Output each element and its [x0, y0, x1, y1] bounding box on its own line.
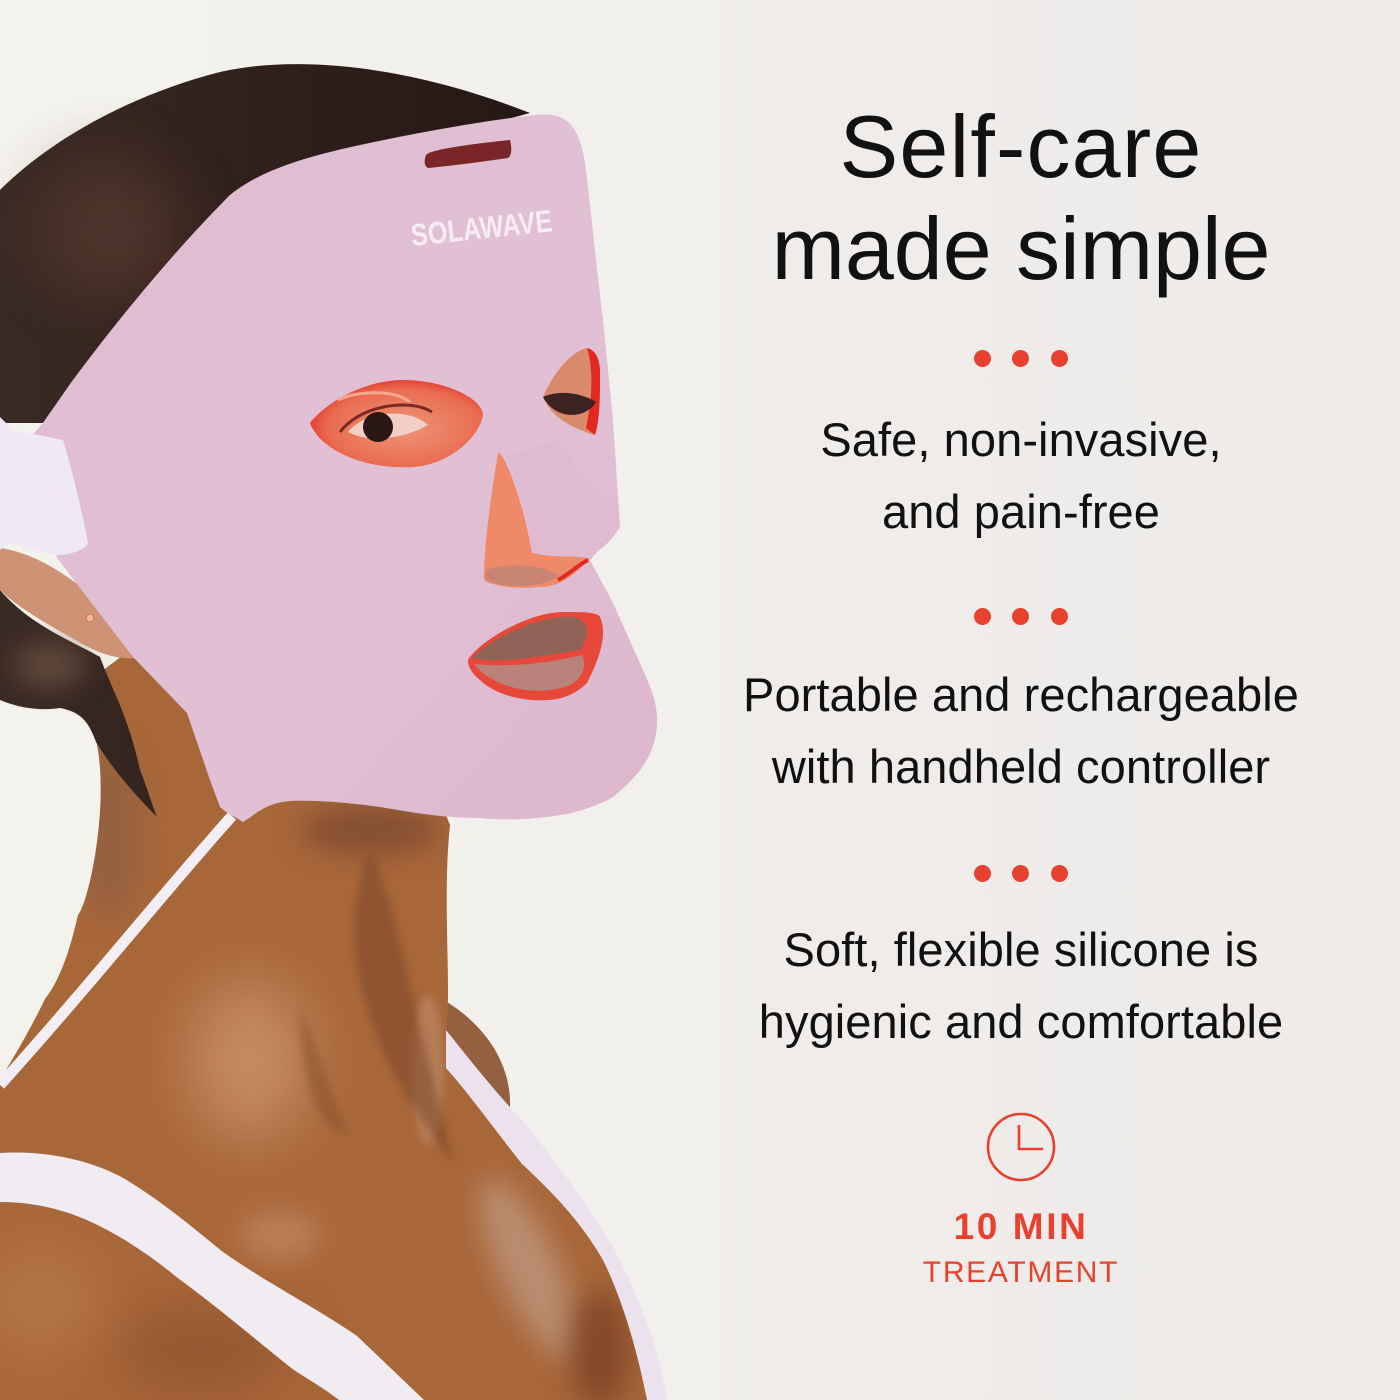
benefit: portable: with handheld controller	[772, 740, 1270, 793]
far shoulder	[440, 998, 510, 1110]
mask	[28, 115, 657, 822]
treatment duration: 10 MIN	[954, 1206, 1088, 1247]
benefit: safe: and pain-free	[882, 485, 1160, 538]
side strap	[0, 417, 88, 555]
photo: woman wearing pink LED face mask	[0, 64, 667, 1400]
hair	[0, 64, 530, 817]
benefit: silicone	[759, 923, 1283, 1048]
benefit: safe	[820, 413, 1222, 538]
treatment duration	[923, 1206, 1119, 1289]
dots divider	[974, 350, 1068, 367]
neck and shoulders	[0, 650, 665, 1400]
benefit: silicone: Soft, flexible silicone is	[784, 923, 1258, 976]
top straps	[0, 1030, 667, 1400]
right eye opening	[543, 348, 600, 435]
mask slot	[425, 140, 511, 168]
left eye opening	[310, 380, 483, 467]
benefit: safe: Safe, non-invasive,	[820, 413, 1222, 466]
title: Self-care	[840, 97, 1202, 196]
benefit: silicone: hygienic and comfortable	[759, 995, 1283, 1048]
icon: clock	[986, 1112, 1056, 1182]
benefit: portable	[743, 668, 1299, 793]
nose opening	[484, 453, 590, 588]
earring	[86, 614, 94, 622]
dots divider	[974, 865, 1068, 882]
dots divider	[974, 608, 1068, 625]
mask logo: SOLAWAVE	[409, 203, 554, 253]
title: made simple	[772, 199, 1270, 298]
ear	[0, 548, 136, 658]
cord	[0, 816, 232, 1085]
mouth opening	[468, 612, 603, 700]
title	[772, 97, 1270, 298]
benefit: portable: Portable and rechargeable	[743, 668, 1299, 721]
nose flap	[507, 440, 620, 557]
treatment duration: TREATMENT	[923, 1256, 1119, 1289]
